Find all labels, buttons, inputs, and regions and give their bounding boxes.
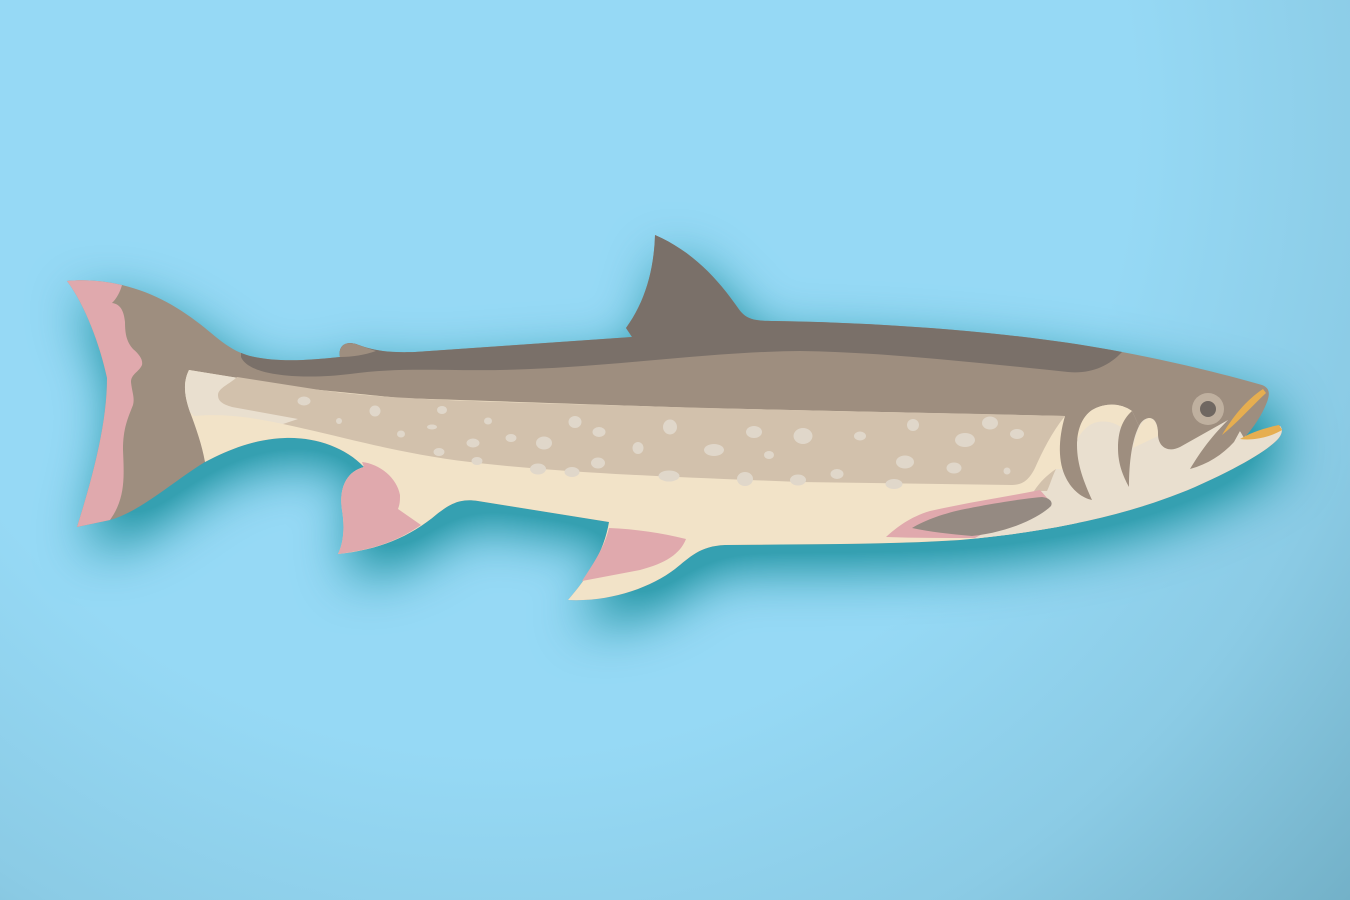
cream cheek patch (1133, 418, 1158, 448)
cream gill patch (1077, 405, 1132, 440)
tail fin pink edge (67, 280, 142, 527)
gill stripes (1060, 411, 1092, 500)
operculum stripe (1118, 411, 1139, 487)
adipose fin (339, 343, 376, 357)
lower head (975, 404, 1282, 539)
fish with drop shadow (67, 200, 1300, 640)
pelvic fin (338, 462, 421, 554)
body silhouette (67, 235, 1282, 600)
eye pupil (1200, 401, 1216, 417)
pectoral fin pink (886, 490, 1048, 538)
pectoral fin grey (912, 497, 1052, 536)
dark back stripe and dorsal fin (241, 235, 1122, 376)
upper jaw (1190, 395, 1268, 469)
eye ring (1192, 393, 1224, 425)
lower lip (1240, 425, 1282, 439)
belly cream (185, 370, 1078, 600)
spotted flank band (218, 377, 1065, 485)
flank spots (298, 396, 1024, 489)
pale flank near tail (185, 370, 296, 424)
upper lip (1222, 389, 1266, 435)
pectoral fin base (1034, 469, 1056, 491)
anal fin (582, 528, 686, 581)
